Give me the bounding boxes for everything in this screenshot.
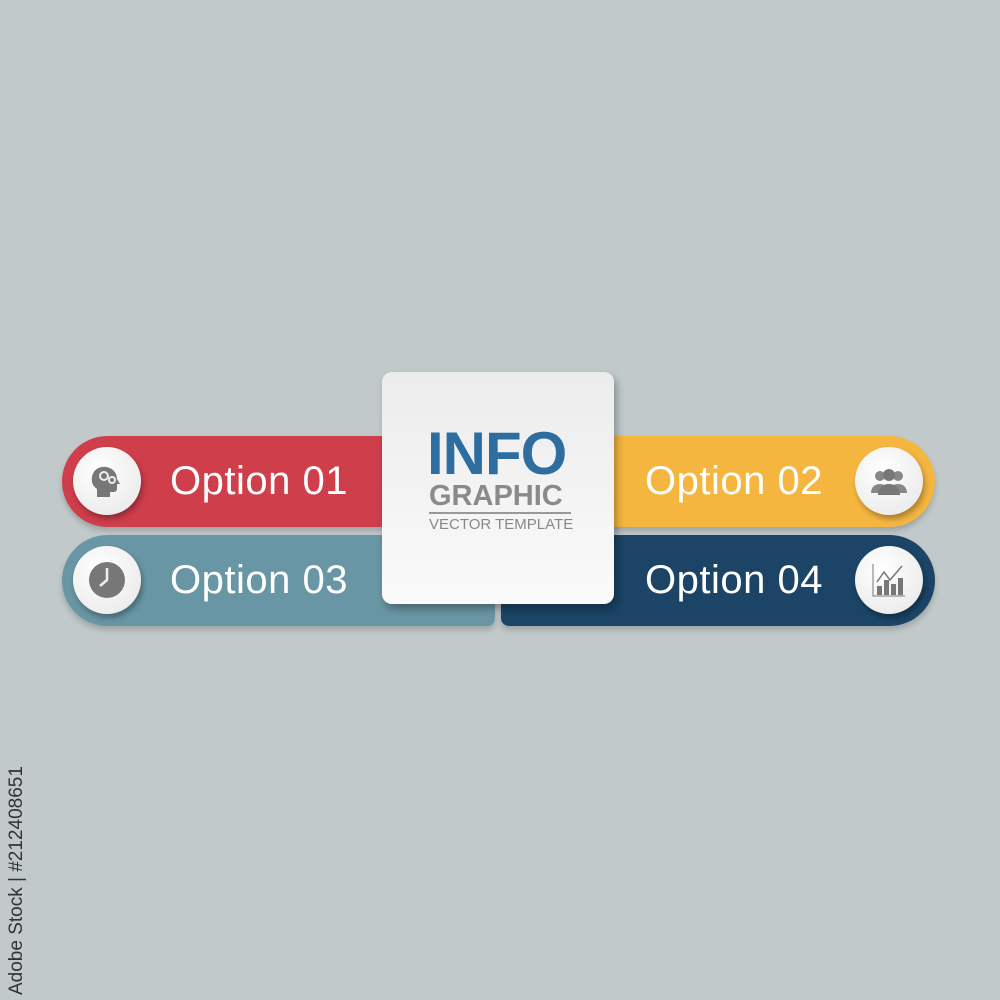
bar: option 03 <box>62 535 495 626</box>
label: option 02: Option 02 <box>645 459 823 503</box>
subtitle: GRAPHIC: GRAPHIC <box>429 480 563 512</box>
center card <box>382 372 614 604</box>
bar: option 04 <box>501 535 935 626</box>
icon: people <box>855 447 923 515</box>
tagline: VECTOR TEMPLATE <box>429 516 573 533</box>
title: INFO: INFO <box>427 420 566 487</box>
label: option 03: Option 03 <box>170 558 348 602</box>
icon: chart <box>855 546 923 614</box>
icon: head with gears <box>73 447 141 515</box>
bar: option 02 <box>598 436 935 527</box>
label: option 01: Option 01 <box>170 459 348 503</box>
bar: option 01 <box>62 436 402 527</box>
label: option 04: Option 04 <box>645 558 823 602</box>
icon: clock <box>73 546 141 614</box>
watermark id: Adobe Stock | #212408651 <box>6 766 27 995</box>
